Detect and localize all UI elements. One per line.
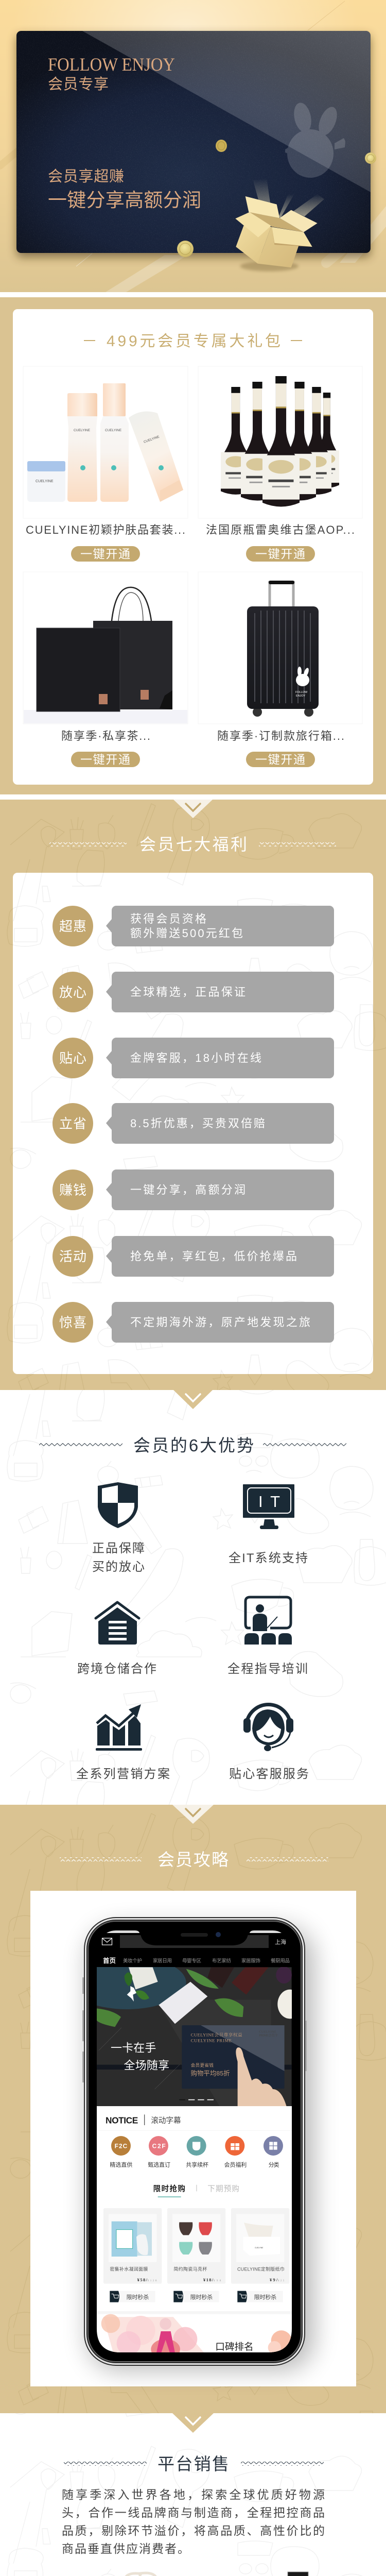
benefit row 7: 不定期海外游，原产地发现之旅 bbox=[130, 1316, 310, 1329]
heading: member guide bbox=[60, 1850, 328, 1869]
heading: platform sales: 平台销售 bbox=[157, 2454, 229, 2473]
app icons: C2F bbox=[152, 2142, 166, 2149]
headline: 一键分享高额分润: 一键分享高额分润 bbox=[48, 190, 201, 211]
flash sale products: ¥58/ bbox=[137, 2277, 148, 2282]
text: product name 4: 随享季·订制款旅行箱... bbox=[217, 730, 344, 742]
flash sale products: ¥128 bbox=[148, 2280, 157, 2282]
text: product name 2: 法国原瓶雷奥维古堡AOP... bbox=[206, 523, 355, 536]
flash sale products: CUELYINE定制版纸巾 bbox=[237, 2266, 285, 2272]
product: suitcase: ENJOY bbox=[296, 694, 306, 698]
arrow: notch chevron bbox=[173, 800, 213, 818]
flash sale products bbox=[103, 2208, 289, 2284]
promo banner: word of mouth ranking bbox=[101, 2314, 291, 2352]
app icons: 精选直供 bbox=[110, 2161, 132, 2168]
benefit row 1 bbox=[52, 906, 334, 946]
nav bar: 首页 bbox=[103, 1957, 116, 1964]
panel: phone showcase bbox=[30, 1891, 356, 2386]
benefit row 3: 金牌客服，18小时在线 bbox=[130, 1052, 261, 1064]
benefit row 2: 全球精选，正品保证 bbox=[130, 986, 245, 998]
text: genuine guarantee bbox=[92, 1541, 145, 1574]
panel: gift pack card bbox=[13, 309, 373, 785]
title: FOLLOW ENJOY: FOLLOW ENJOY bbox=[48, 54, 175, 75]
benefit row 7: 惊喜 bbox=[59, 1315, 86, 1330]
app banner: CUELYINE PRIME bbox=[191, 2038, 232, 2043]
button: open 4 bbox=[246, 752, 315, 767]
sale buttons bbox=[110, 2291, 283, 2302]
app banner: PRIME会员卡 bbox=[259, 2033, 278, 2038]
heading: six advantages bbox=[39, 1436, 346, 1455]
notice bar: 滚动字幕 bbox=[151, 2116, 181, 2125]
status bar bbox=[102, 1922, 286, 1948]
app icons: 分类 bbox=[269, 2161, 279, 2168]
sale buttons: 限时秒杀 bbox=[254, 2294, 276, 2301]
product: skincare set: CUELYINE bbox=[74, 429, 91, 432]
section: six advantages bbox=[0, 1390, 386, 1805]
benefit row 1: 超惠 bbox=[59, 919, 86, 934]
app icons: 甄选直订 bbox=[148, 2161, 170, 2168]
benefit row 6: 抢免单，享红包，低价抢爆品 bbox=[130, 1250, 297, 1263]
icon: small coin bbox=[216, 140, 227, 152]
icon: warehouse bbox=[96, 1602, 139, 1645]
icon: edge coin bbox=[365, 152, 376, 164]
panel: benefits card bbox=[13, 873, 373, 1374]
benefit row 5: 一键分享，高额分润 bbox=[130, 1183, 245, 1196]
icon: growth chart bbox=[96, 1704, 142, 1751]
button: open 2 bbox=[246, 546, 315, 562]
button: open 1 bbox=[71, 546, 140, 562]
product: skincare set: CUELYINE bbox=[143, 435, 160, 444]
app icons bbox=[110, 2136, 283, 2168]
button: open 1: 一键开通 bbox=[80, 547, 130, 561]
text: genuine guarantee: 正品保障 bbox=[92, 1541, 145, 1555]
product: wine bottles bbox=[198, 366, 362, 518]
benefit row 2 bbox=[52, 972, 334, 1012]
app screen content bbox=[97, 2106, 292, 2360]
flash sale products: ¥18/ bbox=[203, 2277, 214, 2282]
app banner: 购物平均85折 bbox=[191, 2069, 230, 2077]
nav bar: 美妆个护 bbox=[123, 1958, 142, 1964]
nav bar: 布艺家纺 bbox=[212, 1958, 231, 1964]
text: warehouse cooperation: 跨境仓储合作 bbox=[77, 1662, 156, 1676]
product: suitcase bbox=[198, 572, 362, 724]
benefit row 1: 额外赠送500元红包 bbox=[130, 927, 243, 940]
phone mockup bbox=[68, 1917, 307, 2366]
nav bar: 家居服饰 bbox=[241, 1958, 260, 1964]
text: product name 3: 随享季·私享茶... bbox=[61, 730, 150, 742]
subtitle: 会员专享: 会员专享 bbox=[48, 76, 109, 93]
text: IT support: 全IT系统支持 bbox=[229, 1551, 308, 1565]
app banner: 一卡在手 bbox=[111, 2042, 156, 2055]
benefit row 4: 8.5折优惠，买贵双倍赔 bbox=[130, 1117, 265, 1130]
icon: rabbit silhouette bbox=[285, 101, 345, 178]
app banner: CUELYINE bbox=[259, 2030, 276, 2034]
heading: seven benefits bbox=[49, 835, 336, 854]
flash sale products: ¥9/ bbox=[270, 2277, 278, 2282]
app banner: CUELYINE会员尊享权益 bbox=[191, 2031, 242, 2037]
heading: gift pack: 499元会员专属大礼包 bbox=[107, 333, 280, 350]
app icons: 会员福利 bbox=[224, 2161, 247, 2168]
logo: Cle de Peau bbox=[124, 2573, 171, 2576]
icon: IT monitor bbox=[243, 1484, 294, 1529]
text block: platform description: 品质，剔除环节溢价，将高品质、高性价比的 bbox=[62, 2524, 325, 2537]
icon: open gift box bbox=[235, 179, 324, 272]
section: member guide bbox=[0, 1805, 386, 2433]
section: gift pack bbox=[0, 297, 386, 794]
flash sale tabs: 下期预购 bbox=[207, 2184, 239, 2193]
section: seven benefits bbox=[0, 800, 386, 1390]
nav bar: 餐厨用品 bbox=[271, 1958, 290, 1964]
text block: platform description: 商品垂直供应消费者。 bbox=[62, 2542, 189, 2555]
nav bar bbox=[103, 1957, 290, 1964]
icon: large coin bbox=[177, 241, 194, 257]
benefit row 7 bbox=[52, 1302, 334, 1343]
arrow: notch chevron bbox=[172, 1805, 214, 1824]
promo banner: word of mouth ranking: 口碑排名 bbox=[215, 2342, 254, 2352]
product: tea gift box bbox=[23, 572, 188, 724]
text block: platform description: 头，合作一线品牌商与制造商，全程把控商品 bbox=[62, 2506, 325, 2519]
nav bar: 母婴专区 bbox=[182, 1958, 201, 1964]
flash sale products: 密集补水凝润面膜 bbox=[110, 2266, 148, 2272]
app banner: 全场随享 bbox=[124, 2059, 169, 2072]
app banner: 会员更省钱 bbox=[191, 2062, 214, 2068]
flash sale products: ¥98 bbox=[214, 2280, 221, 2282]
section: platform sales bbox=[0, 2413, 386, 2576]
flash sale products: CUELYINE bbox=[255, 2247, 264, 2249]
benefit row 4: 立省 bbox=[59, 1116, 86, 1131]
text: genuine guarantee: 买的放心 bbox=[92, 1560, 145, 1574]
text: product name 1: CUELYINE初颖护肤品套装... bbox=[26, 523, 185, 536]
app banner bbox=[97, 1967, 292, 2106]
benefit row 6 bbox=[52, 1236, 334, 1277]
heading: six advantages: 会员的6大优势 bbox=[133, 1436, 254, 1455]
flash sale products: ¥25 bbox=[278, 2280, 285, 2282]
heading: platform sales bbox=[64, 2454, 324, 2473]
flash sale tabs: 限时抢购 bbox=[153, 2184, 185, 2193]
arrow: notch chevron bbox=[173, 1390, 213, 1409]
sale buttons: 限时秒杀 bbox=[190, 2294, 213, 2301]
flash sale tabs bbox=[153, 2184, 239, 2197]
benefit row 3: 贴心 bbox=[59, 1050, 86, 1066]
benefit row 5: 赚钱 bbox=[59, 1182, 86, 1198]
notice bar bbox=[97, 2114, 292, 2131]
flash sale products: 简约陶瓷马克杯 bbox=[173, 2266, 207, 2272]
dark member card bbox=[16, 31, 371, 253]
app icons: F2C bbox=[115, 2142, 128, 2149]
hero banner bbox=[0, 0, 386, 292]
heading: seven benefits: 会员七大福利 bbox=[139, 835, 247, 854]
product: skincare set: CUELYINE bbox=[105, 429, 122, 432]
button: open 4: 一键开通 bbox=[255, 753, 305, 766]
icon: training bbox=[244, 1597, 292, 1645]
button: open 2: 一键开通 bbox=[255, 547, 305, 561]
brand logo wall bbox=[64, 2572, 320, 2576]
notice bar: NOTICE bbox=[106, 2115, 138, 2126]
sale buttons: 限时秒杀 bbox=[127, 2294, 149, 2301]
benefit row 4 bbox=[52, 1103, 334, 1144]
logo: Estee Lauder bbox=[277, 2572, 320, 2576]
icon: IT monitor: IT bbox=[258, 1493, 280, 1511]
text: marketing plan: 全系列营销方案 bbox=[76, 1767, 170, 1781]
heading: member guide: 会员攻略 bbox=[157, 1850, 229, 1869]
benefit row 2: 放心 bbox=[59, 985, 86, 1000]
button: open 3 bbox=[71, 752, 140, 767]
status bar: 上海 bbox=[275, 1938, 286, 1945]
text: full training: 全程指导培训 bbox=[227, 1662, 308, 1676]
text block: platform description bbox=[62, 2488, 325, 2555]
product: suitcase: FOLLOW bbox=[295, 691, 308, 694]
icon: shield bbox=[98, 1482, 138, 1528]
benefit row 6: 活动 bbox=[59, 1249, 86, 1264]
benefit row 1: 获得会员资格 bbox=[130, 912, 206, 925]
benefit row 5 bbox=[52, 1170, 334, 1210]
icon: headset agent bbox=[243, 1705, 293, 1751]
arrow: bottom notch chevron bbox=[172, 2413, 214, 2433]
benefit row 3 bbox=[52, 1038, 334, 1078]
app icons: 共享续杯 bbox=[186, 2161, 208, 2168]
nav bar: 家居日用 bbox=[153, 1958, 172, 1964]
text block: platform description: 随享季深入世界各地，探索全球优质好物源 bbox=[62, 2488, 325, 2501]
text: customer service: 贴心客服服务 bbox=[229, 1767, 309, 1781]
product: skincare set: CUELYINE bbox=[36, 480, 54, 483]
product: skincare set bbox=[23, 366, 188, 518]
button: open 3: 一键开通 bbox=[80, 753, 130, 766]
text: 会员享超赚: 会员享超赚 bbox=[48, 168, 124, 185]
